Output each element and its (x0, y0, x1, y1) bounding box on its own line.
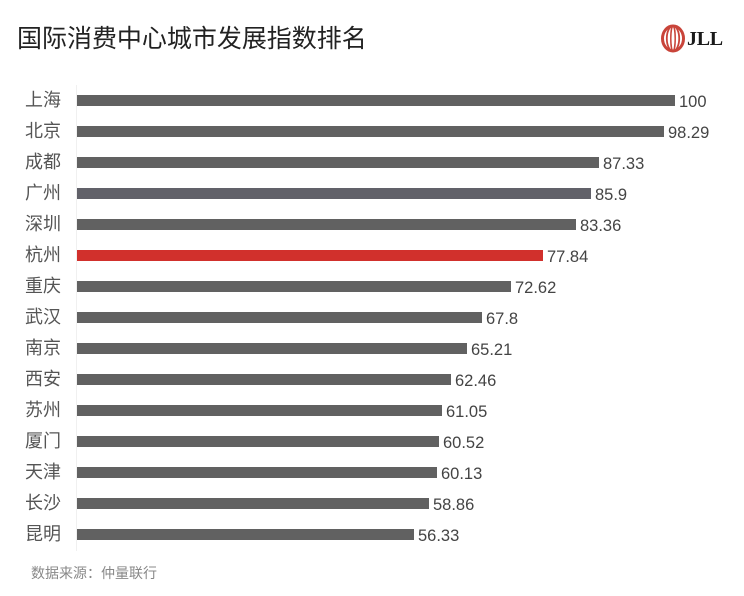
row: 昆明: 56.33 (418, 527, 459, 545)
row: 武汉: 武汉 (25, 307, 61, 327)
row: 北京 (25, 121, 709, 142)
row: 天津 (25, 462, 482, 483)
row: 苏州: 苏州 (25, 400, 61, 420)
row: 杭州 (highlighted): 杭州 (25, 245, 61, 265)
row: 深圳: 83.36 (580, 217, 621, 235)
row: 广州 (25, 183, 627, 204)
row: 北京: 北京 (25, 121, 61, 141)
row: 深圳 (25, 214, 621, 235)
row: 武汉: 67.8 (486, 310, 518, 328)
row: 成都 (25, 152, 644, 173)
row: 上海: 100 (679, 93, 707, 111)
row: 广州: 85.9 (595, 186, 627, 204)
row: 深圳: 深圳 (25, 214, 61, 234)
row: 重庆 (25, 276, 556, 297)
source note: 数据来源：仲量联行 (31, 565, 157, 581)
row: 长沙: 长沙 (25, 493, 61, 513)
row: 西安 (25, 369, 496, 390)
logo: JLL (661, 24, 723, 52)
row: 西安: 西安 (25, 369, 61, 389)
row: 厦门: 厦门 (25, 431, 61, 451)
row: 南京 (25, 338, 512, 359)
row: 上海: 上海 (25, 90, 61, 110)
row: 杭州 (highlighted) (25, 245, 588, 266)
row: 武汉 (25, 307, 518, 328)
logo wordmark: JLL (687, 28, 723, 50)
icon: JLL red rings (661, 24, 685, 52)
row: 昆明 (25, 524, 459, 545)
row: 长沙: 58.86 (433, 496, 474, 514)
row: 成都: 87.33 (603, 155, 644, 173)
row: 天津: 天津 (25, 462, 61, 482)
bar chart (25, 90, 709, 545)
row: 上海 (25, 90, 707, 111)
row: 北京: 98.29 (668, 124, 709, 142)
row: 南京: 南京 (25, 338, 61, 358)
title: 国际消费中心城市发展指数排名 (17, 25, 367, 53)
row: 广州: 广州 (25, 183, 61, 203)
row: 厦门 (25, 431, 484, 452)
row: 成都: 成都 (25, 152, 61, 172)
row: 西安: 62.46 (455, 372, 496, 390)
row: 杭州 (highlighted): 77.84 (547, 248, 588, 266)
row: 苏州: 61.05 (446, 403, 487, 421)
row: 长沙 (25, 493, 474, 514)
row: 昆明: 昆明 (25, 524, 61, 544)
row: 重庆: 重庆 (25, 276, 61, 296)
row: 苏州 (25, 400, 487, 421)
row: 天津: 60.13 (441, 465, 482, 483)
row: 重庆: 72.62 (515, 279, 556, 297)
row: 厦门: 60.52 (443, 434, 484, 452)
row: 南京: 65.21 (471, 341, 512, 359)
